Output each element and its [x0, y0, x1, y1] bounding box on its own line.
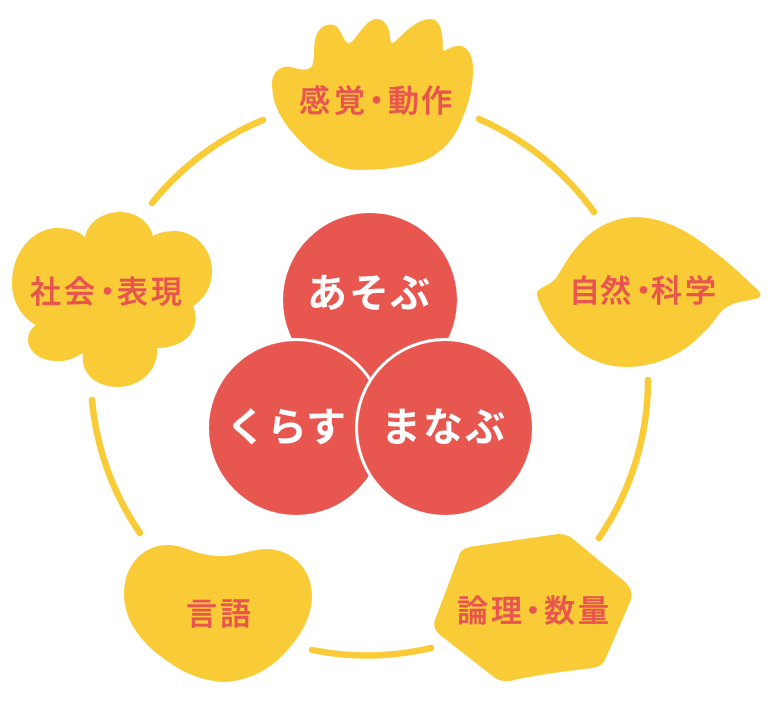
circle: あそぶ: [283, 213, 457, 387]
blob: 感覚・動作: [272, 19, 473, 170]
circle: くらす: くらす: [226, 406, 346, 450]
blob: 社会・表現: 社会・表現: [30, 275, 182, 310]
blob: 論理・数量: [434, 534, 632, 681]
circle: あそぶ: あそぶ: [307, 272, 430, 316]
blob: 感覚・動作: 感覚・動作: [299, 84, 452, 119]
ring: connecting arcs: [92, 119, 648, 655]
blob: 言語: 言語: [186, 597, 251, 632]
blob: 自然・科学: 自然・科学: [569, 274, 716, 309]
circle: まなぶ: まなぶ: [381, 406, 505, 450]
circle: まなぶ: [356, 340, 534, 516]
blob: 言語: [124, 545, 312, 682]
blob: 自然・科学: [537, 217, 760, 367]
circle: くらす: [208, 340, 384, 516]
blob: 社会・表現: [12, 212, 212, 387]
blob: 論理・数量: 論理・数量: [457, 594, 609, 629]
